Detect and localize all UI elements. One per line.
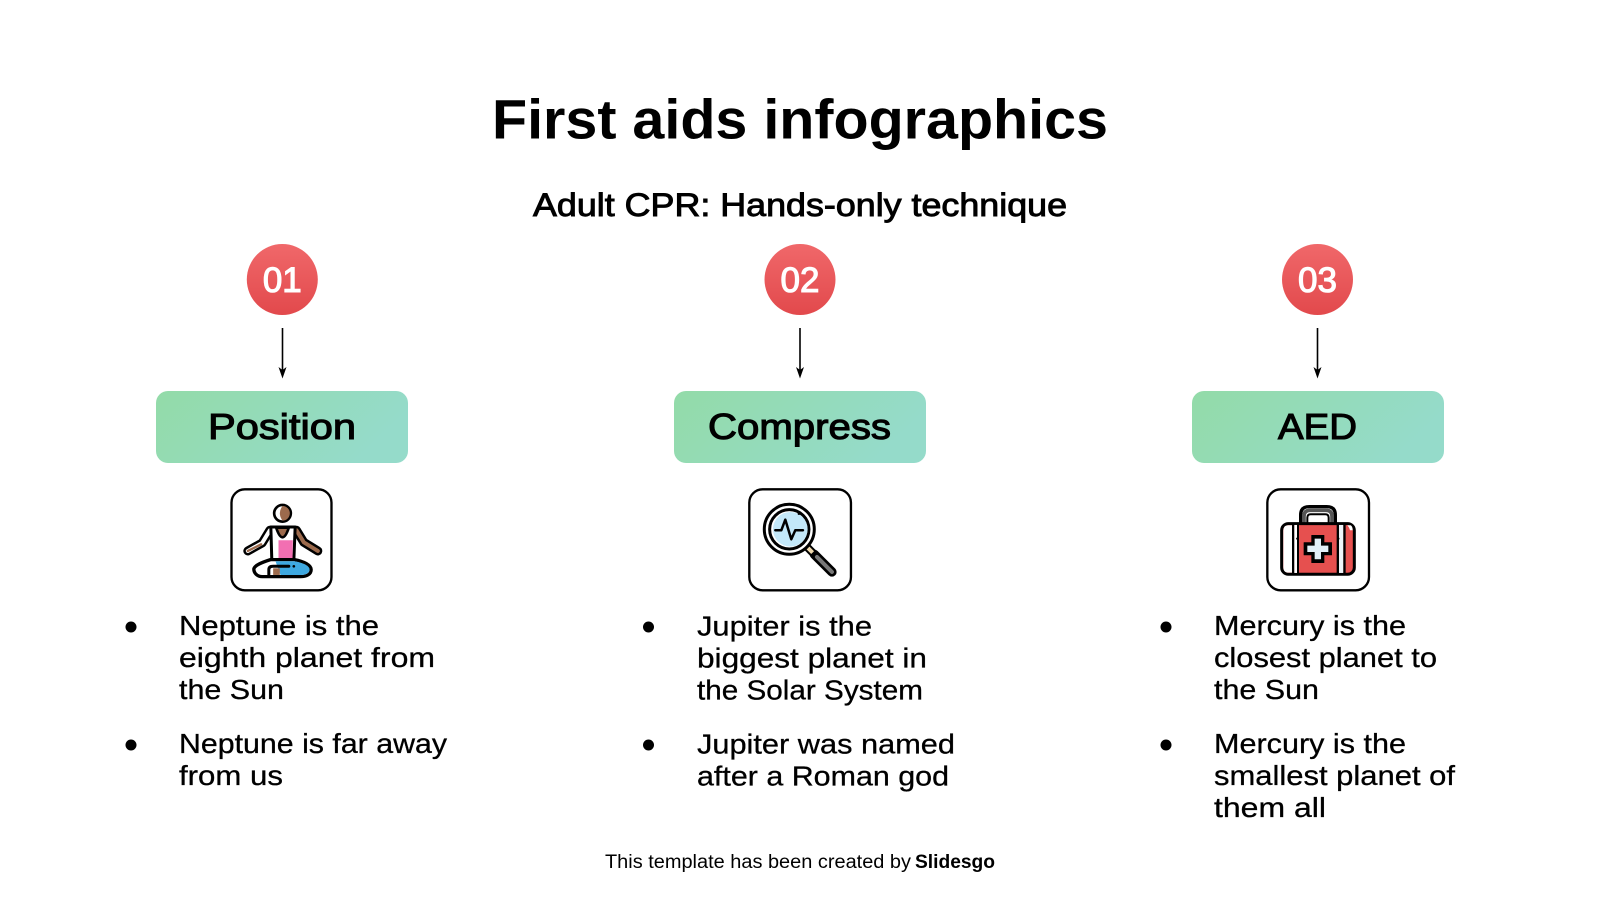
bullet list 2: biggest planet in	[697, 642, 927, 674]
heading: AED	[1192, 391, 1444, 463]
bullet list 1: from us	[179, 760, 283, 791]
heading: Position	[156, 391, 408, 463]
heading: Compress	[674, 391, 926, 463]
heading: Position: Position	[208, 406, 356, 447]
bullet list 1: eighth planet from	[179, 642, 435, 673]
bullet list 2: Jupiter was named	[697, 728, 955, 760]
bullet list 1: Neptune is the	[179, 610, 379, 641]
bullet list 1	[126, 610, 447, 791]
bullet list 1: Neptune is far away	[179, 728, 447, 759]
number badge 02: 02	[781, 261, 819, 300]
bullet list 3: Mercury is the	[1214, 610, 1406, 641]
heading: AED: AED	[1278, 406, 1357, 447]
footer credit: Slidesgo	[915, 852, 995, 873]
bullet list 3: them all	[1214, 792, 1326, 823]
icon: first aid kit	[1267, 489, 1369, 590]
bullet list 3: smallest planet of	[1214, 760, 1455, 791]
bullet list 3: Mercury is the	[1214, 728, 1406, 759]
bullet list 3	[1160, 610, 1455, 823]
footer credit: This template has been created by	[605, 852, 912, 873]
icon: meditating person	[231, 489, 331, 590]
number badge 02	[764, 244, 836, 315]
bullet list 3: the Sun	[1214, 674, 1319, 705]
number badge 01: 01	[263, 261, 302, 300]
subtitle: Adult CPR: Hands-only technique	[533, 187, 1067, 223]
bullet list 2: after a Roman god	[697, 760, 949, 792]
bullet list 2: the Solar System	[697, 674, 923, 706]
heading: Compress: Compress	[708, 406, 891, 447]
panel: step 3 AED	[1160, 244, 1455, 823]
bullet list 2	[643, 610, 955, 792]
title: First aids infographics	[492, 88, 1108, 150]
number badge 01	[247, 244, 318, 315]
panel: step 1 position	[126, 244, 447, 791]
icon: magnifying glass with pulse	[749, 489, 851, 590]
arrow 3	[1314, 328, 1322, 378]
arrow 2	[796, 328, 804, 378]
panel: step 2 compress	[643, 244, 955, 792]
arrow 1	[278, 328, 286, 378]
number badge 03	[1282, 244, 1353, 315]
bullet list 1: the Sun	[179, 674, 284, 705]
bullet list 2: Jupiter is the	[697, 610, 872, 642]
bullet list 3: closest planet to	[1214, 642, 1437, 673]
number badge 03: 03	[1298, 261, 1337, 300]
